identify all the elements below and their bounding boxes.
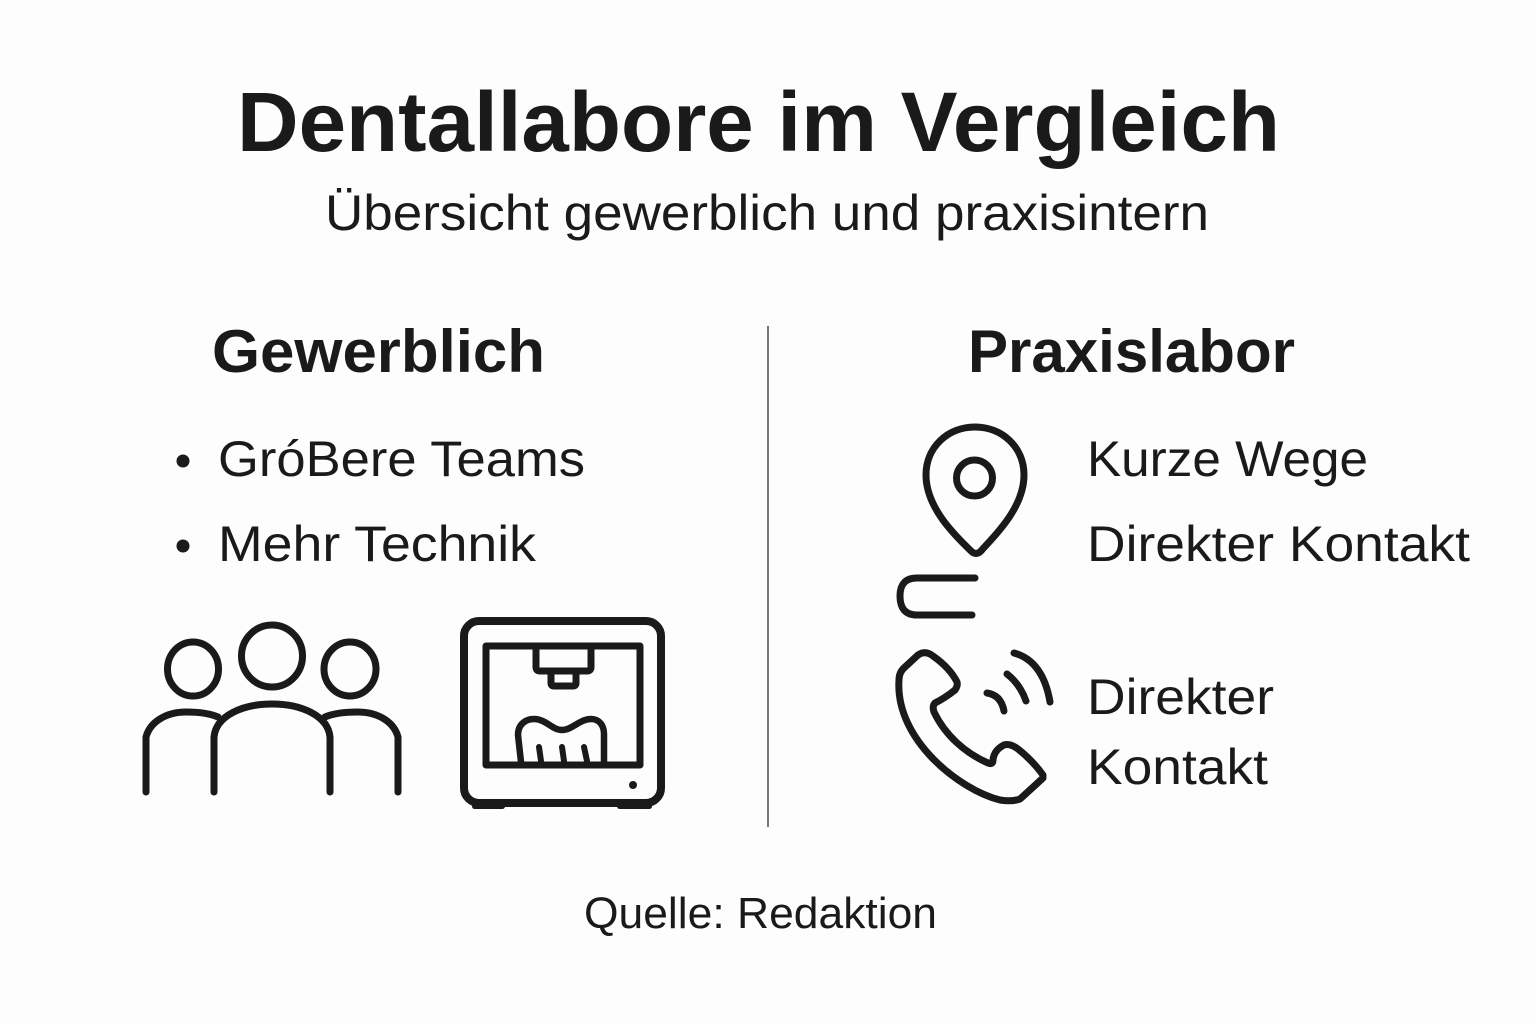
icon: team of three people	[146, 625, 398, 792]
text: kontakt: Kontakt	[1087, 739, 1268, 795]
bullet list: Mehr Technik	[218, 516, 537, 572]
text: direkter kontakt: Direkter Kontakt	[1087, 516, 1470, 572]
bullet list: GróBere Teams	[218, 431, 585, 487]
text: direkter: Direkter	[1087, 669, 1274, 725]
icon: telephone with signal waves	[899, 653, 1050, 801]
heading: praxislabor: Praxislabor	[968, 318, 1295, 385]
icon: 3D printer with tooth	[464, 621, 661, 809]
panel: gewerblich	[146, 318, 661, 809]
source note: Quelle: Redaktion	[584, 889, 937, 938]
bullet list	[176, 431, 585, 572]
text: kurze wege: Kurze Wege	[1087, 431, 1368, 487]
panel: praxislabor	[899, 318, 1470, 801]
icon: location pin	[900, 427, 1024, 615]
center divider	[767, 326, 769, 827]
heading: gewerblich: Gewerblich	[212, 318, 545, 385]
title: Dentallabore im Vergleich	[237, 75, 1280, 169]
subtitle: Übersicht gewerblich und praxisintern	[325, 185, 1209, 241]
